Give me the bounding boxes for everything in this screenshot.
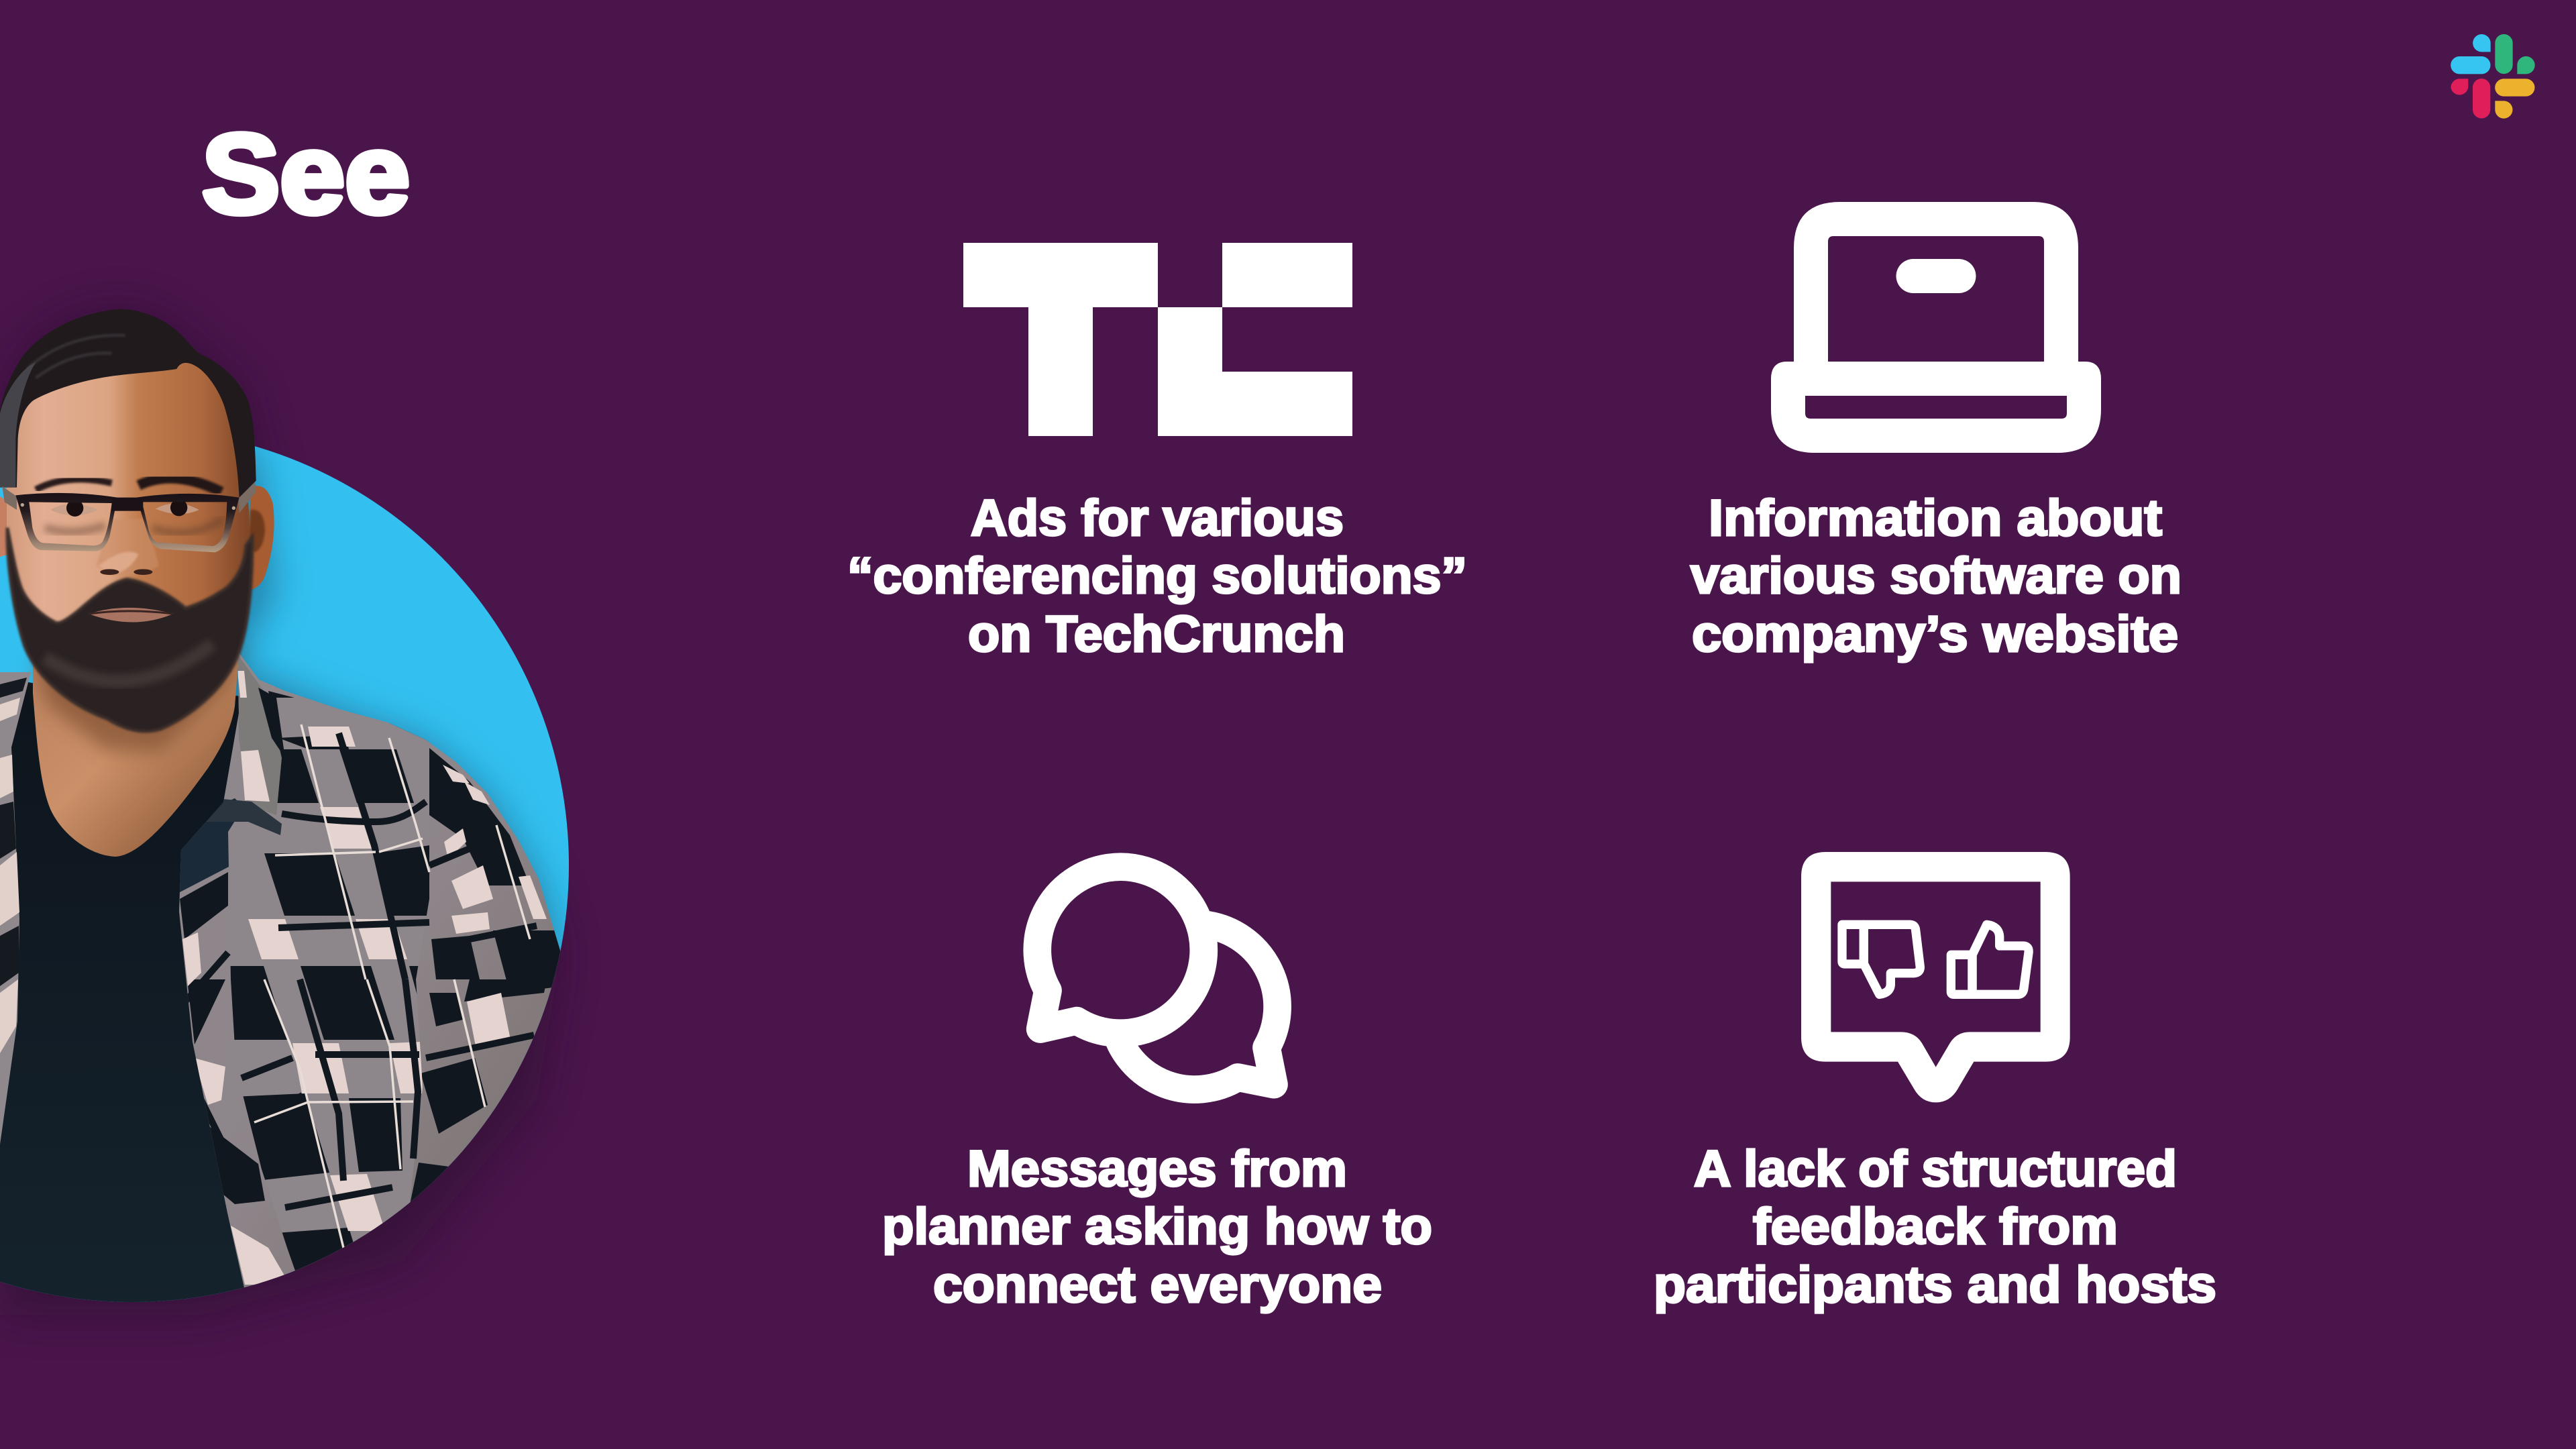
text: Ads for various conferencing solutions on TechCrunch: “conferencing solutions” (847, 547, 1467, 604)
head (0, 309, 274, 731)
clothing clipped to circle (0, 641, 561, 1302)
lips (89, 608, 173, 622)
thumb up (1951, 924, 2029, 994)
sleeve and shoulder dark blocks (268, 691, 564, 1208)
plaid flannel shirt (179, 653, 561, 1288)
text: Messages from planner asking how to connect everyone (882, 1140, 1432, 1313)
dark rows (231, 737, 429, 1271)
under-eye shading (45, 519, 223, 533)
front panel plaid grid (228, 698, 429, 1271)
text: Information about various software on company's website: Information about (1709, 490, 2162, 547)
text: Messages from planner asking how to connect everyone: connect everyone (933, 1256, 1382, 1313)
nose (96, 519, 159, 575)
text: A lack of structured feedback from participants and hosts: feedback from (1753, 1198, 2118, 1255)
text: Ads for various conferencing solutions on TechCrunch: on TechCrunch (968, 606, 1345, 663)
placket diagonal plaid (180, 872, 265, 1204)
speech box (1801, 852, 2070, 1102)
hair (0, 309, 256, 498)
dark t-shirt (0, 678, 268, 1315)
left ear (0, 496, 8, 557)
collar (237, 654, 282, 815)
glasses (2, 482, 256, 552)
sleeve white patches (443, 765, 547, 1044)
text: A lack of structured feedback from participants and hosts (1654, 1140, 2216, 1313)
icon: two chat bubbles (1037, 867, 1277, 1089)
text: Messages from planner asking how to connect everyone: Messages from (967, 1140, 1347, 1197)
neck (33, 637, 240, 857)
chin highlights (45, 644, 213, 682)
circle shading near the figure (235, 447, 568, 951)
text: Ads for various conferencing solutions on TechCrunch (847, 490, 1467, 663)
white cells (248, 727, 423, 1231)
text: Ads for various conferencing solutions on TechCrunch: Ads for various (971, 490, 1344, 547)
text: Information about various software on company's website: various software on (1690, 547, 2182, 604)
icon: TechCrunch TC logo (963, 243, 1352, 436)
thin dark stripes (181, 733, 537, 1208)
left plaid shirt sliver (0, 672, 31, 1144)
icon: Slack logo (2451, 34, 2535, 119)
icon: laptop (1771, 202, 2101, 453)
eyes (50, 504, 99, 515)
thin white stripes (254, 724, 530, 1248)
blue circle (0, 429, 569, 1302)
face (7, 344, 250, 729)
drop shadow (0, 309, 561, 1315)
text: Messages from planner asking how to connect everyone: planner asking how to (882, 1198, 1432, 1255)
beard (7, 528, 252, 731)
text: Information about various software on company's website: company’s website (1692, 606, 2178, 663)
right ear (248, 486, 274, 590)
text: A lack of structured feedback from participants and hosts: A lack of structured (1694, 1140, 2177, 1197)
text: A lack of structured feedback from participants and hosts: participants and hosts (1654, 1256, 2216, 1313)
text: Information about various software on company's website (1690, 490, 2182, 663)
portrait of presenter on blue circle (0, 309, 597, 1328)
eyebrows (36, 479, 112, 490)
icon: feedback bubble with thumbs (1801, 852, 2070, 1102)
title: See: See (202, 111, 410, 237)
thumb down (1842, 924, 1920, 994)
